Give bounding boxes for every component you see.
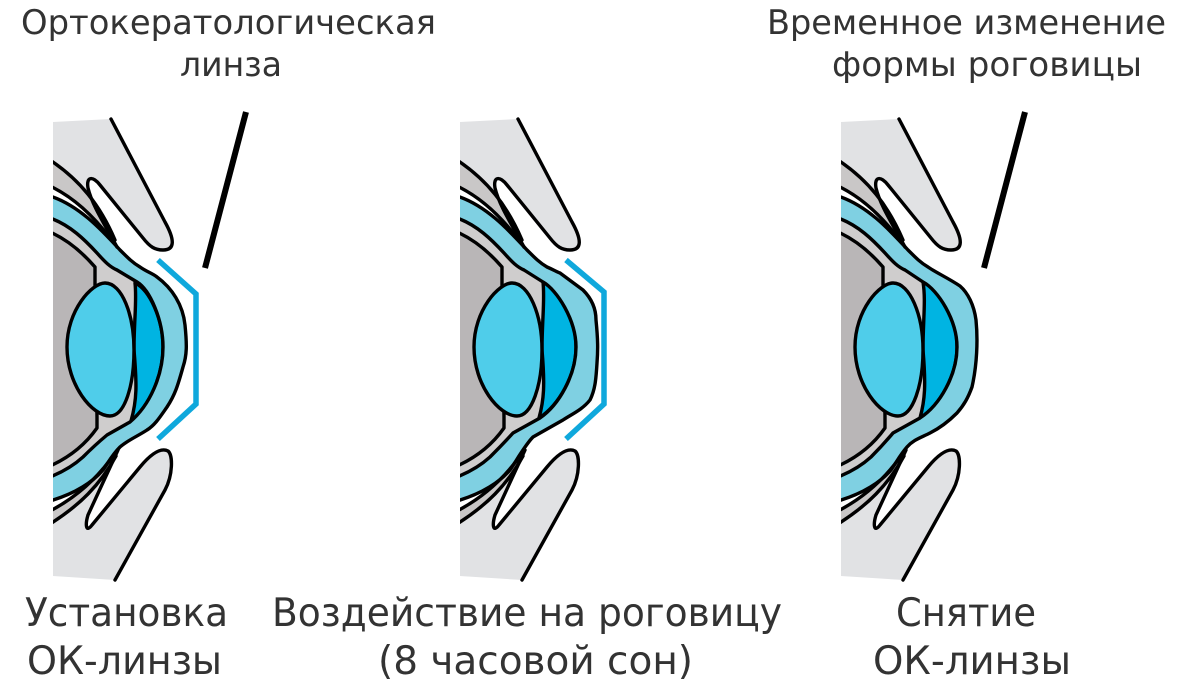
- white sliver gaps: [460, 190, 500, 508]
- upper eyelid: [53, 119, 172, 250]
- anterior chamber: [539, 282, 576, 418]
- vitreous body: [50, 232, 97, 466]
- cornea band: [838, 196, 977, 501]
- panel: lens removed: [838, 119, 977, 580]
- heading: orthokeratology lens: [21, 3, 436, 85]
- heading: temporary cornea change: [767, 3, 1166, 85]
- eye interior: [906, 272, 923, 424]
- caption: lens removal: [873, 591, 1071, 684]
- caption: lens removal: Снятие: [896, 591, 1036, 636]
- white sliver gaps: [53, 190, 92, 508]
- lower eyelid: [53, 450, 171, 580]
- caption: lens placement: Установка: [25, 591, 228, 636]
- crystalline lens: [855, 283, 923, 416]
- caption: lens placement: ОК-линзы: [27, 639, 222, 684]
- icon: ortho-k lens on eye: [158, 260, 196, 439]
- arrow line: lens pointer: [205, 112, 246, 268]
- crystalline lens: [67, 283, 134, 416]
- arrow line: cornea shape pointer: [984, 112, 1025, 268]
- upper eyelid: [841, 119, 960, 250]
- cornea band: [457, 196, 598, 501]
- eye interior: [525, 272, 542, 424]
- icon: ortho-k lens pressing cornea: [566, 260, 604, 439]
- conjunctiva layers: [460, 164, 516, 520]
- eyelid outlines: [457, 119, 579, 580]
- heading: orthokeratology lens: линза: [180, 45, 282, 85]
- conjunctiva layers: [53, 164, 109, 520]
- upper eyelid: [460, 119, 579, 250]
- vitreous body: [457, 232, 504, 466]
- white sliver gaps: [841, 190, 880, 508]
- lower eyelid: [460, 450, 578, 580]
- conjunctiva layers: [841, 164, 898, 520]
- eyelid outlines: [838, 119, 960, 580]
- panel: effect on cornea: [457, 119, 598, 580]
- caption: effect on cornea: (8 часовой сон): [378, 639, 693, 684]
- vitreous body: [838, 232, 885, 466]
- crystalline lens: [474, 283, 542, 416]
- lower eyelid: [841, 450, 959, 580]
- caption: lens placement: [25, 591, 228, 684]
- panel: eye with lens placed: [50, 119, 186, 580]
- heading: temporary cornea change: формы роговицы: [832, 45, 1142, 85]
- heading: orthokeratology lens: Ортокератологическая: [21, 3, 436, 43]
- caption: lens removal: ОК-линзы: [873, 639, 1071, 684]
- heading: temporary cornea change: Временное изменение: [767, 3, 1166, 43]
- eyelid outlines: [50, 119, 172, 580]
- caption: effect on cornea: Воздействие на роговицу: [272, 591, 782, 636]
- eye interior: [118, 272, 134, 427]
- anterior chamber: [131, 283, 163, 421]
- cornea band: [50, 196, 186, 501]
- caption: effect on cornea: [272, 591, 782, 684]
- anterior chamber: [920, 282, 957, 418]
